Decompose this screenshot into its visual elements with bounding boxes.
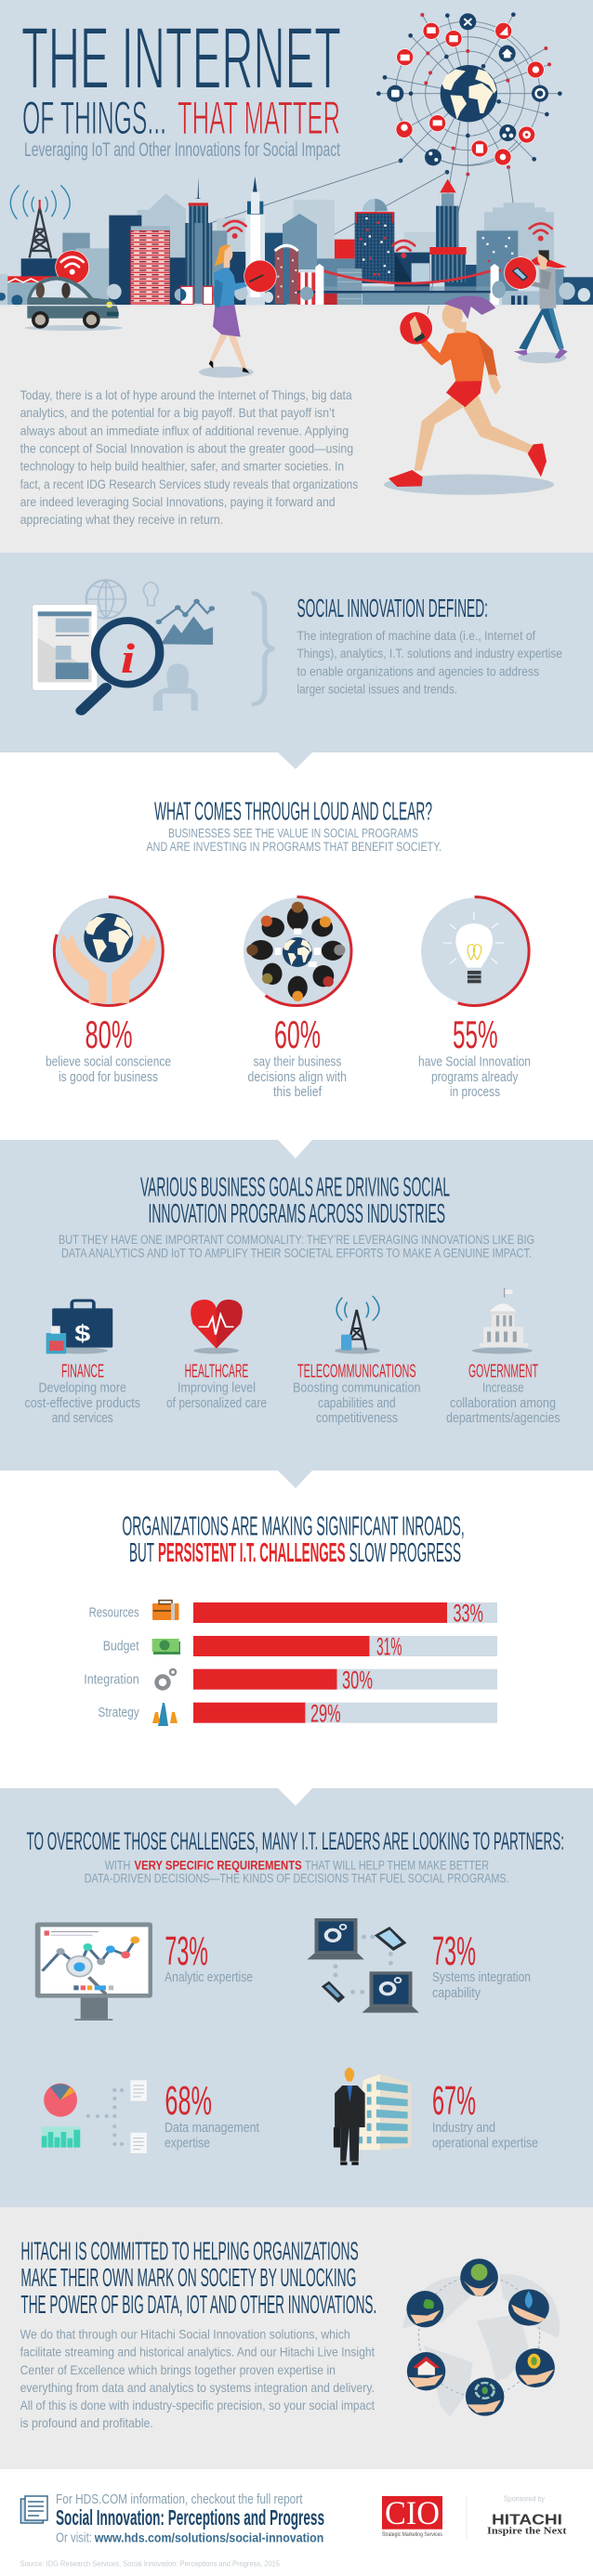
navy icon nodes xyxy=(387,13,548,165)
background: hero sky xyxy=(0,0,593,306)
subtitle: Leveraging IoT and Other Innovations for Social Impact xyxy=(24,139,340,161)
intro paragraph: analytics, and the potential for a big payoff. But that payoff isn’t xyxy=(20,405,335,420)
industry descriptions: cost-effective products xyxy=(24,1395,140,1411)
bar values: 33% xyxy=(454,1600,483,1628)
heading: BUT xyxy=(129,1538,154,1568)
stat captions xyxy=(46,1054,531,1100)
paragraph: We do that through our Hitachi Social Innovation solutions, which xyxy=(20,2327,350,2342)
street trees xyxy=(107,281,590,303)
report link text: Or visit: xyxy=(56,2530,92,2546)
network diagram around globe xyxy=(376,12,562,177)
dark mid block xyxy=(394,253,429,291)
stat numbers: 55% xyxy=(453,1013,498,1056)
radio tower xyxy=(10,185,70,258)
red icon nodes xyxy=(396,22,544,165)
bar chart xyxy=(84,1600,497,1728)
partner stats xyxy=(165,1929,538,2151)
white spire tower xyxy=(245,177,265,297)
industry descriptions: competitiveness xyxy=(316,1410,398,1426)
partner stats: Industry and xyxy=(432,2120,495,2136)
intro paragraph: technology to help build healthier, safer, and smarter societies. In xyxy=(20,459,344,474)
right dotted building xyxy=(477,230,518,291)
partner stats: capability xyxy=(432,1985,481,2001)
stat captions: is good for business xyxy=(59,1069,158,1085)
stat captions: have Social Innovation xyxy=(418,1054,531,1070)
icon: document xyxy=(20,2496,47,2523)
stat captions: believe social conscience xyxy=(46,1054,171,1070)
heading xyxy=(122,1512,465,1568)
industry descriptions: collaboration among xyxy=(450,1395,556,1411)
stat captions: this belief xyxy=(273,1084,323,1100)
industry labels: TELECOMMUNICATIONS xyxy=(297,1362,416,1382)
bar labels xyxy=(84,1605,139,1720)
small red dots xyxy=(420,13,551,177)
panel: business goals xyxy=(0,1140,593,1488)
intro paragraph: always about an immediate influx of additional revenue. Applying xyxy=(20,423,349,438)
panel: hitachi commitment xyxy=(0,2207,593,2469)
sponsor: Hitachi: Sponsored by xyxy=(504,2495,545,2504)
car xyxy=(25,276,123,331)
intro paragraph: appreciating what they receive in return. xyxy=(20,512,223,527)
partner stats: 73% xyxy=(432,1929,476,1974)
stat numbers: 60% xyxy=(274,1013,321,1056)
definition text: to enable organizations and agencies to address xyxy=(297,663,539,678)
footer xyxy=(20,2491,567,2569)
industry descriptions: departments/agencies xyxy=(446,1410,560,1426)
partner stats: Data management xyxy=(165,2120,260,2136)
woman with phone xyxy=(199,245,276,378)
globe xyxy=(441,65,497,122)
partner stats: Systems integration xyxy=(432,1969,531,1985)
subheading xyxy=(85,1858,509,1886)
industry descriptions: Improving level xyxy=(178,1380,256,1395)
bar labels: Integration xyxy=(84,1672,139,1688)
bar values: 31% xyxy=(376,1633,402,1661)
subheading: AND ARE INVESTING IN PROGRAMS THAT BENEFIT SOCIETY. xyxy=(147,840,441,854)
paragraph: Center of Excellence which brings together proven expertise in xyxy=(20,2362,336,2377)
industry labels: FINANCE xyxy=(61,1362,104,1382)
panel: IT challenges xyxy=(84,1512,497,1728)
hospital building xyxy=(275,245,298,304)
bar values: 29% xyxy=(310,1700,341,1728)
ground line xyxy=(0,305,593,306)
bar values xyxy=(310,1600,483,1728)
icon: telecommunications tower xyxy=(335,1296,380,1353)
icon ring with world map xyxy=(402,2258,560,2417)
paragraph: facilitate streaming and historical analytics. And our Hitachi Live Insight xyxy=(20,2345,375,2360)
notch xyxy=(278,752,312,769)
logo: CIO: Strategic Marketing Services xyxy=(382,2532,442,2538)
intro paragraph: the concept of Social Innovation is about the greater good—using xyxy=(20,440,353,455)
icon: analytics monitor xyxy=(35,1922,152,2020)
panel: IT challenges: SLOW PROGRESS xyxy=(349,1538,461,1568)
icon: finance briefcase xyxy=(46,1301,112,1353)
definition text: The integration of machine data (i.e., Internet of xyxy=(297,628,535,643)
stat circle 60 percent xyxy=(243,897,351,1005)
heading xyxy=(20,2237,376,2319)
clock tower xyxy=(429,179,477,291)
report link text: Social Innovation: Perceptions and Progress xyxy=(56,2505,324,2530)
sponsor: Hitachi: HITACHI xyxy=(492,2512,562,2528)
bar values: 30% xyxy=(342,1667,373,1694)
icon: toolbox xyxy=(152,1601,178,1620)
stat numbers xyxy=(86,1013,498,1056)
floating wifi signals xyxy=(224,221,552,258)
industry descriptions: capabilities and xyxy=(318,1395,396,1411)
red striped tower xyxy=(131,226,170,305)
paragraph: All of this is done with industry-specific precision, so your social impact xyxy=(20,2398,375,2413)
intro paragraph: are indeed leveraging Social Innovations, paying it forward and xyxy=(20,494,336,509)
icon: businessman and building xyxy=(334,2067,411,2165)
sponsor: Hitachi: Inspire the Next xyxy=(487,2526,567,2537)
background: hero ground xyxy=(0,305,593,553)
paragraph: everything from data and analytics to systems integration and delivery. xyxy=(20,2380,375,2395)
icon: data management charts xyxy=(42,2080,147,2153)
definition text xyxy=(297,628,562,697)
partner stats: operational expertise xyxy=(432,2136,538,2151)
back buildings xyxy=(21,193,554,305)
subheading: WITH xyxy=(105,1858,130,1872)
industry labels: HEALTHCARE xyxy=(185,1362,248,1382)
stat captions: decisions align with xyxy=(247,1069,347,1085)
panel: what comes through xyxy=(46,797,531,1100)
city skyline xyxy=(0,122,593,495)
report link text xyxy=(56,2491,324,2546)
partner stats: 67% xyxy=(432,2078,476,2124)
stat captions: programs already xyxy=(431,1069,519,1085)
partner stats: 73% xyxy=(165,1929,208,1974)
bar labels: Budget xyxy=(103,1639,139,1654)
sponsor: Hitachi xyxy=(487,2495,567,2537)
icon: connected laptops xyxy=(307,1918,419,2013)
illustration: tablet and magnifier xyxy=(33,580,274,711)
empire tower xyxy=(181,177,213,305)
title xyxy=(21,9,341,161)
industry descriptions: and services xyxy=(52,1410,113,1426)
paragraph: is profound and profitable. xyxy=(20,2415,153,2430)
left low building xyxy=(0,274,59,306)
intro paragraph: Today, there is a lot of hype around the Internet of Things, big data xyxy=(20,387,352,402)
logo: CIO: CIO xyxy=(385,2494,440,2531)
icon: gears xyxy=(156,1669,176,1689)
man with tablet xyxy=(505,250,568,363)
industry descriptions: of personalized care xyxy=(166,1395,267,1411)
report link text: www.hds.com/solutions/social-innovation xyxy=(94,2530,323,2545)
stat captions: say their business xyxy=(254,1054,341,1070)
industry labels xyxy=(61,1362,538,1382)
bridge xyxy=(297,264,499,305)
subheading: THAT WILL HELP THEM MAKE BETTER xyxy=(305,1858,489,1872)
source note: Source: IDG Research Services, Social Innovation: Perceptions and Progress, 2015 xyxy=(20,2559,280,2569)
intro paragraph xyxy=(20,387,358,527)
title: OF THINGS... xyxy=(22,92,166,144)
subheading xyxy=(59,1233,534,1260)
illustration: tablet and magnifier: i xyxy=(121,635,135,682)
industry descriptions: Increase xyxy=(482,1380,524,1395)
right low buildings xyxy=(502,255,593,305)
industry descriptions xyxy=(24,1380,560,1426)
report link text: For HDS.COM information, checkout the full report xyxy=(56,2491,303,2507)
heading xyxy=(140,1172,450,1229)
icon: money xyxy=(152,1639,180,1654)
subheading: BUSINESSES SEE THE VALUE IN SOCIAL PROGRAMS xyxy=(168,827,418,841)
subheading: VERY SPECIFIC REQUIREMENTS xyxy=(134,1858,302,1872)
title line: that matter: THAT MATTER xyxy=(178,92,340,144)
panel: social innovation defined xyxy=(0,553,593,769)
icon: healthcare heart xyxy=(191,1300,243,1353)
icon: government building xyxy=(472,1288,533,1353)
node glyphs xyxy=(391,19,546,162)
icon: chess pieces xyxy=(152,1703,178,1726)
car wifi badge xyxy=(56,251,89,284)
definition text: larger societal issues and trends. xyxy=(297,682,457,697)
panel: partners xyxy=(0,1788,593,2207)
partner stats: Analytic expertise xyxy=(165,1969,253,1985)
dotted high-rise xyxy=(355,199,394,283)
stat numbers: 80% xyxy=(86,1013,132,1056)
connector lines xyxy=(90,122,520,314)
partner stats: expertise xyxy=(165,2136,210,2151)
partner stats: 68% xyxy=(165,2078,212,2124)
icon: finance briefcase: $ xyxy=(74,1320,91,1346)
subheading xyxy=(147,827,441,854)
paragraph xyxy=(20,2327,375,2430)
runner xyxy=(384,295,554,495)
bar labels: Strategy xyxy=(98,1705,139,1720)
heading: PERSISTENT I.T. CHALLENGES xyxy=(158,1538,346,1568)
stat captions: in process xyxy=(450,1084,500,1100)
small navy dots xyxy=(376,12,562,175)
stat circle 80 percent xyxy=(54,897,163,1005)
industry descriptions: Boosting communication xyxy=(293,1380,420,1395)
industry descriptions: Developing more xyxy=(39,1380,126,1395)
stat circle 55 percent xyxy=(420,897,529,1005)
intro paragraph: fact, a recent IDG Research Services study reveals that organizations xyxy=(20,477,358,491)
bar labels: Resources xyxy=(89,1605,139,1621)
